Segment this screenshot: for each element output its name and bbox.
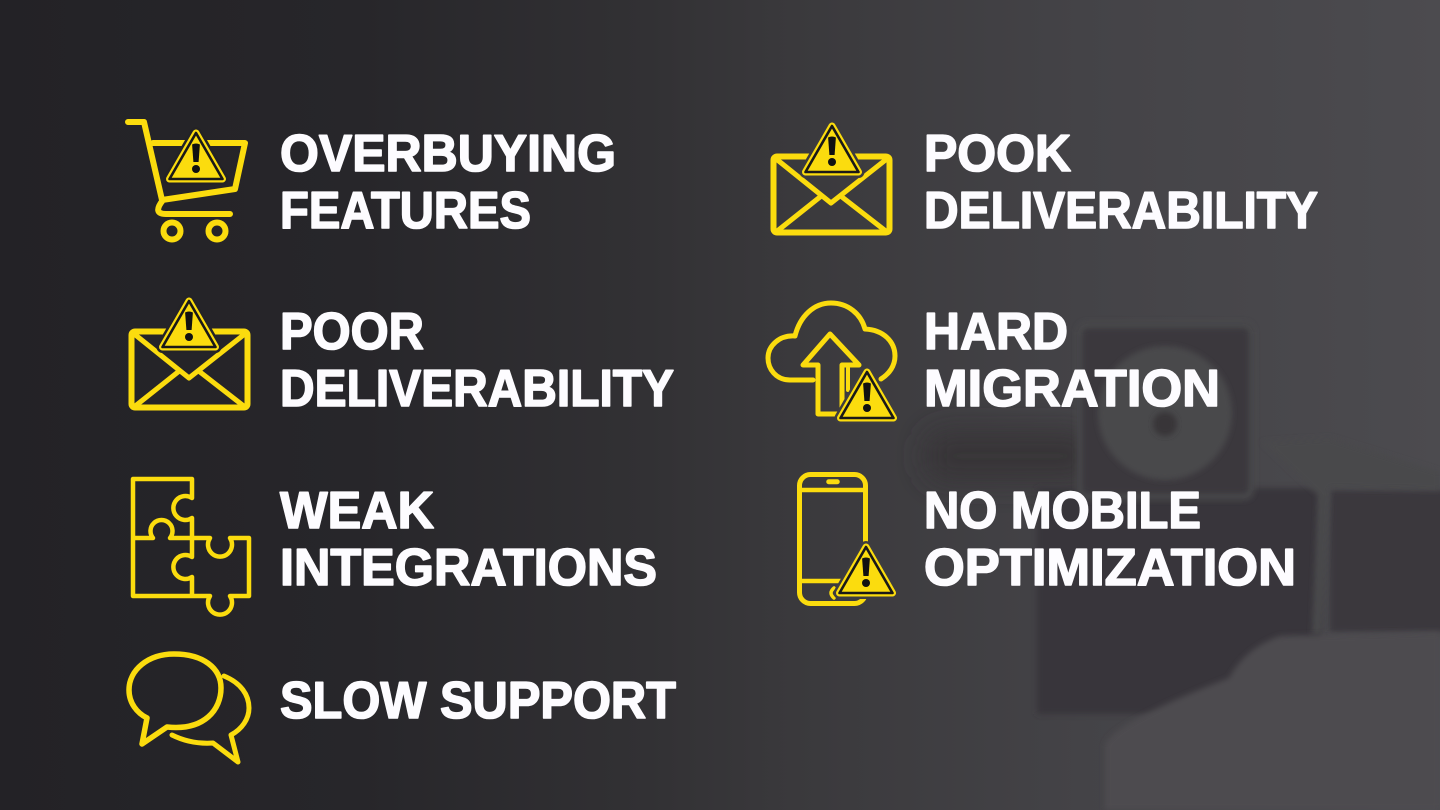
heading: weak integrations: WEAK [280, 482, 434, 540]
heading: hard migration [924, 303, 1220, 418]
icon: envelope with warning [774, 126, 890, 232]
icon: puzzle pieces [133, 479, 249, 615]
heading: pook deliverability: DELIVERABILITY [924, 182, 1318, 240]
heading: no mobile optimization [924, 482, 1296, 597]
heading: poor deliverability: POOR [280, 303, 424, 361]
icon: chat bubbles [129, 654, 249, 762]
heading: hard migration: MIGRATION [924, 360, 1220, 418]
icon: smartphone with warning [800, 474, 892, 604]
heading: pook deliverability: POOK [924, 125, 1071, 183]
icon: cloud upload with warning [768, 303, 895, 418]
icon: shopping cart with warning [128, 122, 245, 240]
heading: poor deliverability: DELIVERABILITY [280, 360, 674, 418]
heading: pook deliverability [924, 125, 1318, 240]
heading: overbuying features: OVERBUYING [280, 125, 616, 183]
item: slow support [129, 654, 676, 762]
heading: overbuying features [280, 125, 616, 240]
item: weak integrations [133, 479, 657, 615]
item: no mobile optimization [800, 474, 1296, 604]
heading: poor deliverability [280, 303, 674, 418]
heading: weak integrations [280, 482, 657, 597]
item: hard migration [768, 303, 1220, 418]
heading: no mobile optimization: NO MOBILE [924, 482, 1201, 540]
item: poor deliverability [132, 301, 674, 418]
heading: slow support: SLOW SUPPORT [280, 672, 676, 730]
icon: envelope with warning [132, 301, 248, 408]
heading: hard migration: HARD [924, 303, 1068, 361]
item: overbuying features [128, 122, 616, 240]
heading: no mobile optimization: OPTIMIZATION [924, 539, 1296, 597]
item: pook deliverability [774, 125, 1318, 240]
heading: weak integrations: INTEGRATIONS [280, 539, 657, 597]
heading: overbuying features: FEATURES [280, 182, 531, 240]
